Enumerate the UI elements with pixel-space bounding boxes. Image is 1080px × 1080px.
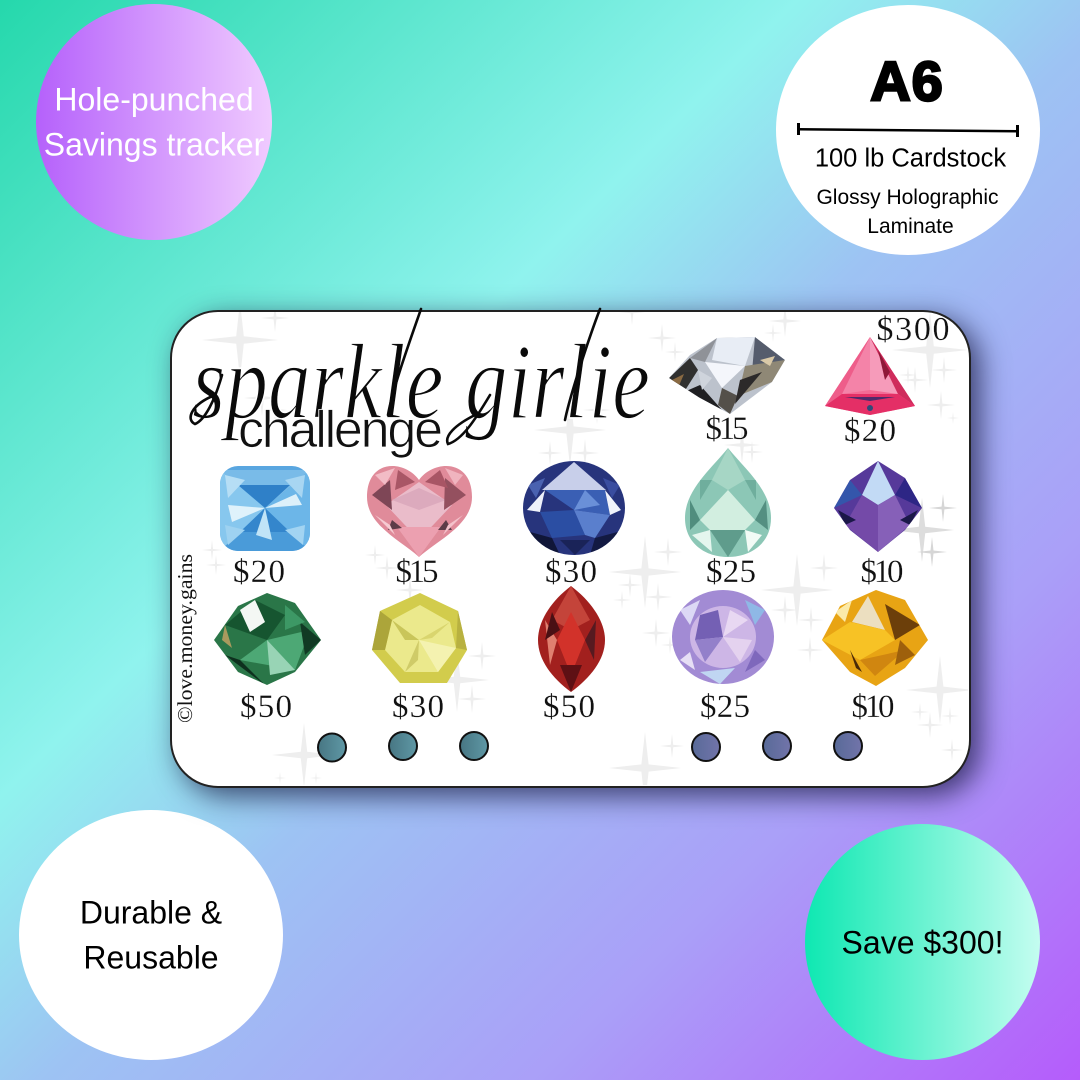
title: sparkle girlie: sparkle girlie [192, 323, 650, 442]
badge: durable and reusable: Reusable [83, 940, 219, 976]
price labels: $25 [706, 554, 756, 590]
title: challenge: challenge [238, 401, 443, 459]
badge: A6 cardstock specification: A6 [870, 50, 944, 112]
size rule [797, 123, 1019, 137]
badge: hole-punched savings tracker: Savings tracker [44, 126, 264, 162]
sparkles background [202, 299, 974, 804]
gem: red marquise [538, 586, 605, 692]
price labels: $20 [233, 554, 285, 590]
price labels: $30 [545, 554, 597, 590]
price labels: $20 [844, 413, 896, 449]
panel: savings tracker card [170, 310, 971, 788]
price labels: $25 [700, 689, 750, 725]
badge: save $300 [805, 824, 1040, 1060]
gem: purple diamond [834, 461, 922, 552]
badge: hole-punched savings tracker: Hole-punched [54, 82, 254, 118]
badge: A6 cardstock specification [776, 5, 1040, 255]
total: $300: $300 [876, 311, 950, 348]
card artwork [177, 123, 1019, 785]
badge: save $300: Save $300! [842, 924, 1003, 960]
badge: hole-punched savings tracker [36, 4, 272, 240]
badge: A6 cardstock specification: Glossy Holographic [816, 186, 999, 209]
credit: love.money.gains: ©love.money.gains [173, 554, 197, 723]
badge: durable and reusable [19, 810, 283, 1060]
badge: A6 cardstock specification: Laminate [867, 215, 954, 238]
gem: pink triangle [825, 337, 915, 415]
badge: durable and reusable: Durable & [80, 894, 222, 930]
gem: dark blue round [523, 461, 625, 555]
price labels: $15 [706, 411, 748, 447]
gem: amber cushion [820, 588, 930, 688]
price labels: $10 [860, 554, 904, 590]
price labels: $10 [852, 689, 894, 725]
price labels [233, 411, 904, 725]
gem: yellow heptagon [372, 593, 467, 683]
price labels: $30 [392, 689, 444, 725]
price labels: $50 [240, 689, 292, 725]
gem: green cushion [214, 593, 321, 685]
gem: white diamond [669, 337, 785, 414]
price labels: $15 [396, 554, 438, 590]
gem: mint pear [683, 446, 773, 559]
price labels: $50 [543, 689, 595, 725]
gem: lavender round [670, 588, 777, 686]
gem: pink heart [367, 466, 472, 557]
punched holes [318, 732, 862, 762]
badge: A6 cardstock specification: 100 lb Cardstock [815, 144, 1006, 172]
gem: blue cushion [218, 464, 312, 553]
